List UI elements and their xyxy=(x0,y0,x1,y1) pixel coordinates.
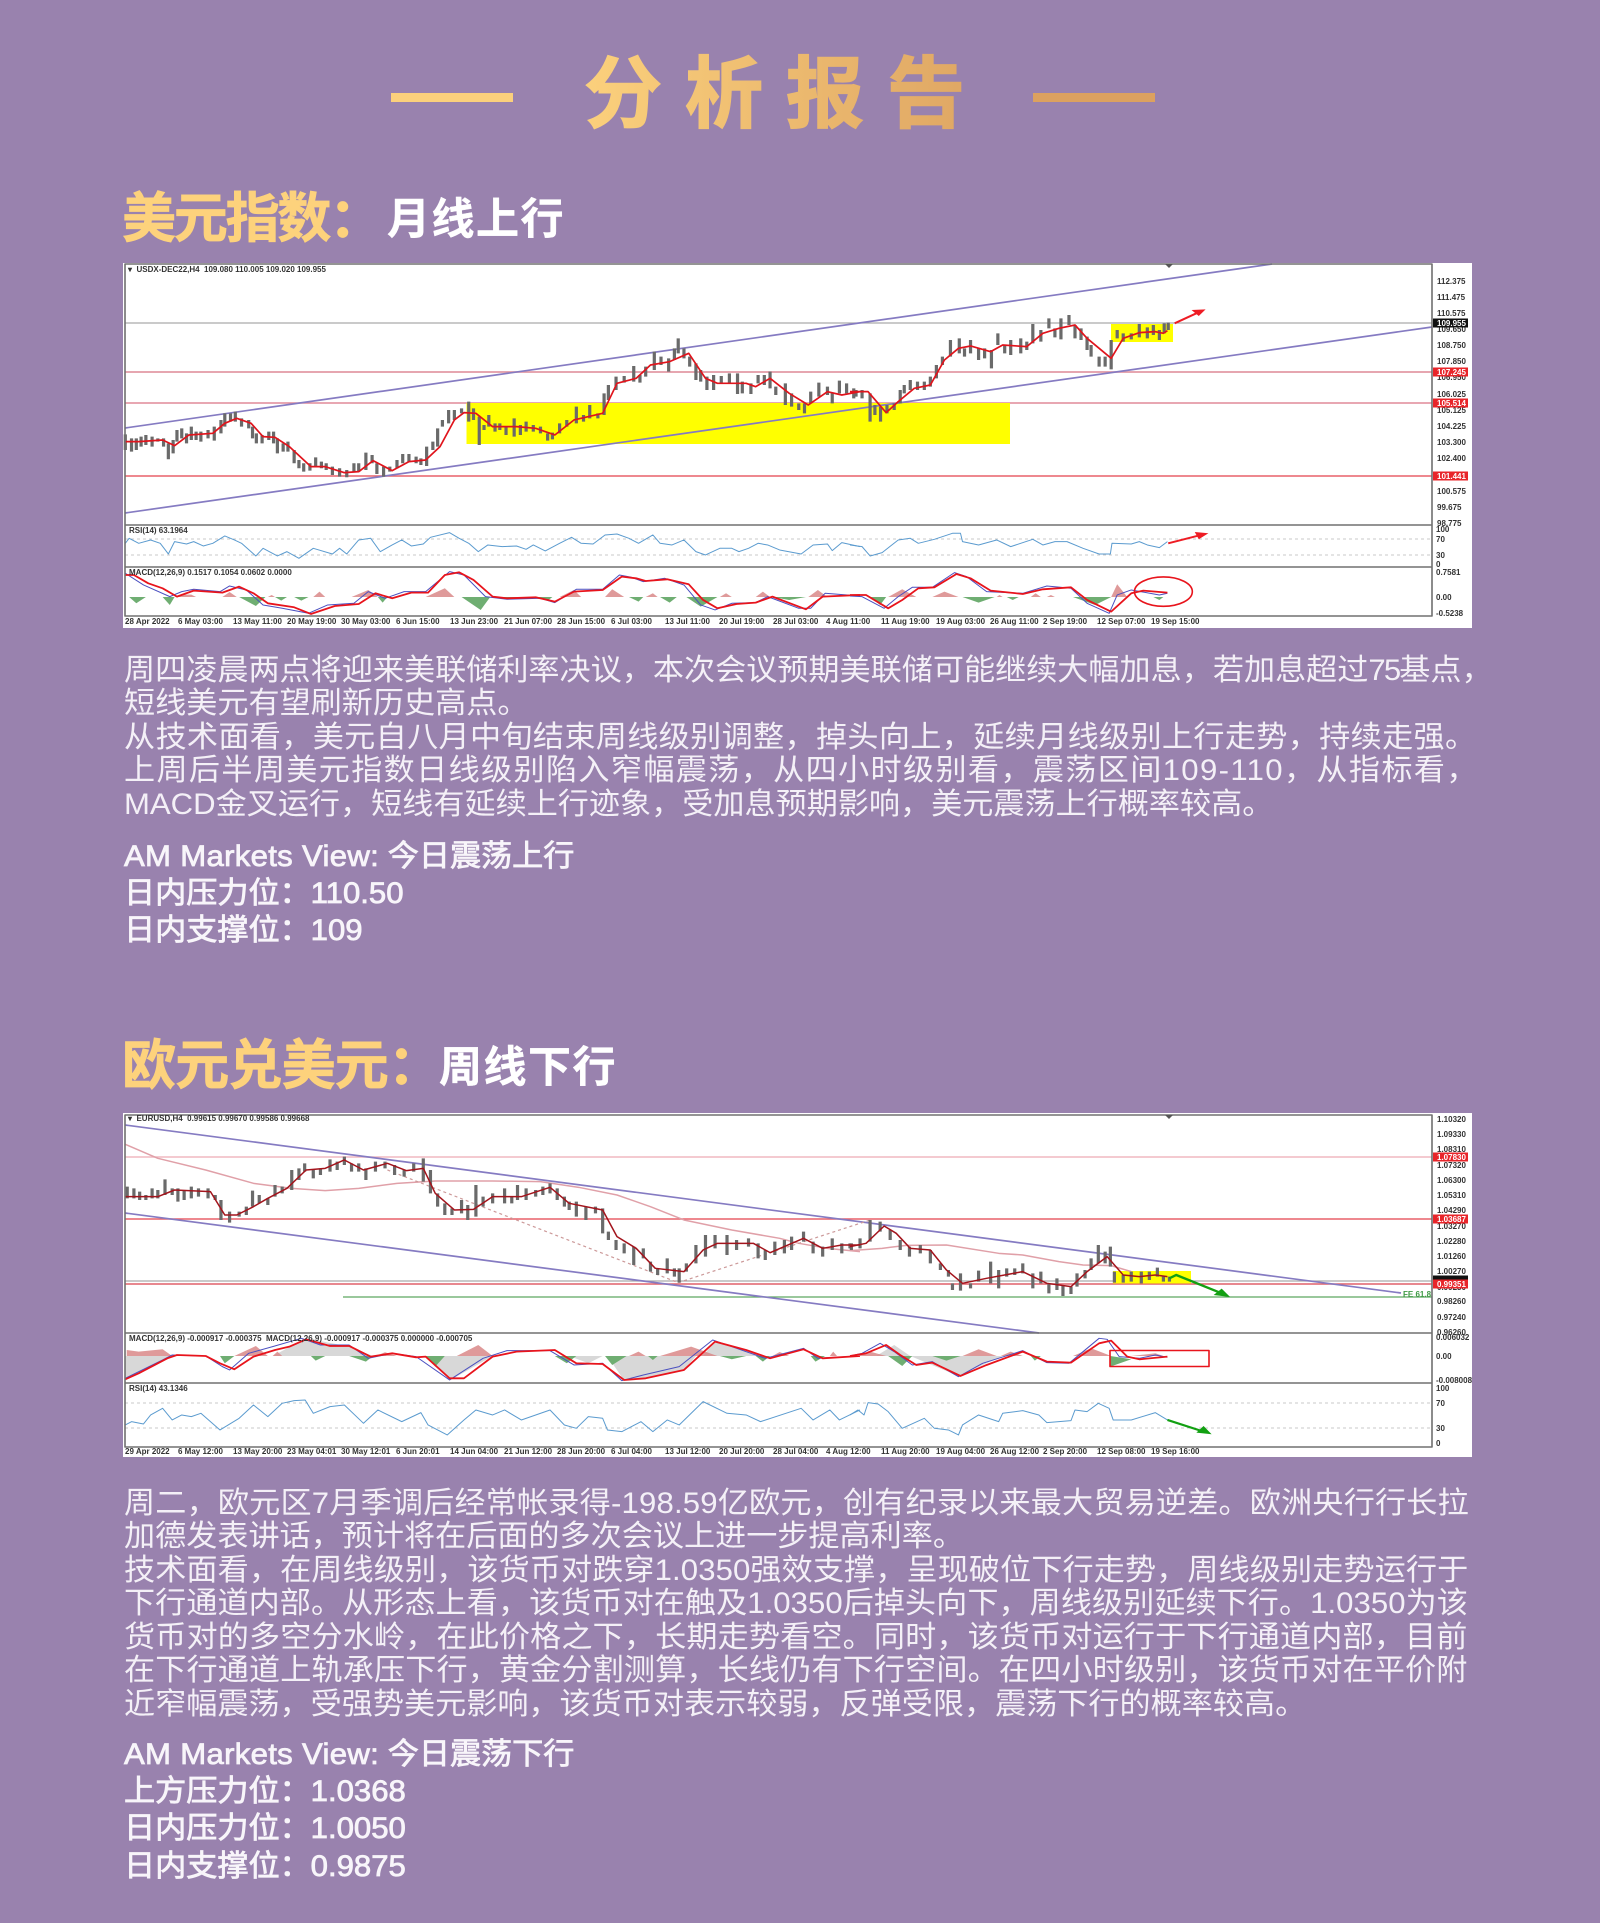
price axis labels: 104.225 xyxy=(1437,422,1466,431)
chart: USDX H4 xyxy=(123,263,1472,628)
price axis labels: 109.955 xyxy=(1437,319,1466,328)
horizontal levels xyxy=(125,323,1432,476)
price axis labels: 103.300 xyxy=(1437,438,1466,447)
arrow: RSI up xyxy=(1168,532,1208,543)
text block: euro analysis: 加德发表讲话，预计将在后面的多次会议上进一步提高利率。 xyxy=(124,1520,964,1553)
price axis labels: 0.006032 xyxy=(1436,1333,1470,1342)
arrow: RSI down xyxy=(1167,1420,1212,1434)
price axis labels: 111.475 xyxy=(1437,293,1466,302)
text block: euro analysis xyxy=(124,1486,1469,1721)
price axis labels: 1.01260 xyxy=(1437,1252,1466,1261)
text block: euro analysis: 周二，欧元区7月季调后经常帐录得-198.59亿欧元，创有纪录以来最大贸易逆差。欧洲央行行长拉 xyxy=(124,1486,1469,1520)
text block: dollar view and levels: AM Markets View: 今日震荡上行 xyxy=(124,840,574,873)
text block: dollar view and levels: 日内支撑位：109 xyxy=(124,914,363,947)
RSI caption: RSI(14) 43.1346 xyxy=(129,1384,188,1393)
price axis labels: 100.575 xyxy=(1437,487,1466,496)
price axis labels: 109.650 xyxy=(1437,325,1466,334)
time axis labels: 13 May 11:00 xyxy=(233,617,282,626)
time axis labels: 2 Sep 19:00 xyxy=(1043,617,1088,626)
text block: euro view and levels: 日内压力位：1.0050 xyxy=(124,1812,406,1845)
price axis labels: 98.775 xyxy=(1437,519,1462,528)
long moving average xyxy=(125,1144,1131,1272)
price axis labels: 106.025 xyxy=(1437,390,1466,399)
time axis labels: 20 Jul 20:00 xyxy=(719,1447,765,1456)
time axis labels: 30 May 03:00 xyxy=(341,617,391,626)
MACD caption: MACD(12,26,9) 0.1517 0.1054 0.0602 0.0000 xyxy=(129,568,292,577)
price axis labels: 0.98260 xyxy=(1437,1297,1466,1306)
time axis labels: 14 Jun 04:00 xyxy=(450,1447,499,1456)
text block: dollar analysis: 周四凌晨两点将迎来美联储利率决议，本次会议预期美联储可能继续大幅加息，若加息超过75基点， xyxy=(124,654,1493,686)
text block: euro analysis: 近窄幅震荡，受强势美元影响，该货币对表示较弱，反弹受限，震荡下行的概率较高。 xyxy=(124,1688,1306,1721)
FE level label: FE 61.8 xyxy=(1403,1290,1432,1299)
top marker xyxy=(1165,1115,1173,1119)
time axis labels: 26 Aug 11:00 xyxy=(990,617,1039,626)
text block: dollar view and levels xyxy=(124,840,574,947)
time axis labels: 13 Jul 12:00 xyxy=(665,1447,711,1456)
price axis labels: 0.00 xyxy=(1436,593,1452,602)
price axis labels: 0.00 xyxy=(1436,1352,1452,1361)
text block: dollar view and levels: 日内压力位：110.50 xyxy=(124,877,404,910)
yellow consolidation zones xyxy=(466,324,1173,444)
arrow: price up xyxy=(1175,309,1206,323)
time axis labels: 21 Jun 12:00 xyxy=(504,1447,553,1456)
text block: euro view and levels: 上方压力位：1.0368 xyxy=(124,1775,406,1808)
time axis labels: 19 Sep 16:00 xyxy=(1151,1447,1200,1456)
price axis labels: 107.850 xyxy=(1437,357,1466,366)
time axis labels: 6 Jul 04:00 xyxy=(611,1447,652,1456)
price axis labels: 112.375 xyxy=(1437,277,1466,286)
price axis labels: 1.04290 xyxy=(1437,1206,1466,1215)
price axis labels: 0.99230 xyxy=(1437,1283,1466,1292)
subheading: monthly up: 月线上行 xyxy=(387,196,565,244)
candles: right half xyxy=(850,1220,1169,1296)
price axis labels: -0.008008 xyxy=(1436,1376,1472,1385)
time axis labels: 6 May 03:00 xyxy=(178,617,223,626)
candles: left half xyxy=(125,338,854,477)
price axis labels: 105.125 xyxy=(1437,406,1466,415)
text block: dollar analysis: 上周后半周美元指数日线级别陷入窄幅震荡，从四小时级别看，震荡区间109-110，从指标看， xyxy=(124,754,1479,787)
time axis labels: 28 Jun 20:00 xyxy=(557,1447,606,1456)
panel: MACD xyxy=(125,1338,1167,1381)
time axis labels: 6 Jun 15:00 xyxy=(396,617,440,626)
panel: RSI xyxy=(125,533,1432,558)
price axis labels: 110.575 xyxy=(1437,309,1466,318)
price axis labels: 1.00270 xyxy=(1437,1267,1466,1276)
time axis labels: 23 May 04:01 xyxy=(287,1447,337,1456)
price axis labels: 0 xyxy=(1436,560,1441,569)
price axis labels: 1.10320 xyxy=(1437,1115,1466,1124)
candles: right half xyxy=(856,315,1168,422)
price axis labels: 1.03270 xyxy=(1437,1222,1466,1231)
arrow: price down xyxy=(1169,1275,1230,1297)
time axis labels xyxy=(125,617,1200,626)
price axis labels: 0.99351 xyxy=(1437,1280,1466,1289)
text block: dollar analysis xyxy=(124,654,1493,821)
moving average xyxy=(125,1160,1167,1287)
price axis labels: 101.441 xyxy=(1437,472,1466,481)
text block: euro analysis: 下行通道内部。从形态上看，该货币对在触及1.0350后掉头向下，周线级别延续下行。1.0350为该 xyxy=(124,1587,1468,1620)
time axis labels: 6 Jun 20:01 xyxy=(396,1447,440,1456)
heading: EUR/USD: 欧元兑美元： xyxy=(122,1036,441,1096)
price axis labels: 100 xyxy=(1436,1384,1450,1393)
title decoration right xyxy=(1033,93,1155,102)
text block: euro view and levels: 日内支撑位：0.9875 xyxy=(124,1850,406,1883)
price axis labels: 0.7581 xyxy=(1436,568,1461,577)
price axis labels: 1.06300 xyxy=(1437,1176,1466,1185)
price axis labels: 70 xyxy=(1436,535,1445,544)
price axis labels: 106.950 xyxy=(1437,373,1466,382)
dashed pattern lines xyxy=(387,1170,870,1283)
time axis labels: 6 Jul 03:00 xyxy=(611,617,652,626)
text block: euro analysis: 货币对的多空分水岭，在此价格之下，长期走势看空。同时，该货币对运行于下行通道内部，目前 xyxy=(124,1621,1468,1654)
price axis labels: 102.400 xyxy=(1437,454,1466,463)
chart frame xyxy=(125,264,1432,616)
chart: EURUSD H4 xyxy=(123,1113,1472,1457)
text block: euro analysis: 技术面看，在周线级别，该货币对跌穿1.0350强效支撑，呈现破位下行走势，周线级别走势运行于 xyxy=(124,1554,1468,1587)
time axis labels: 30 May 12:01 xyxy=(341,1447,391,1456)
heading: US dollar index: 美元指数： xyxy=(122,188,381,248)
price axis labels: 30 xyxy=(1436,1424,1445,1433)
horizontal levels xyxy=(125,1157,1432,1297)
time axis labels xyxy=(125,1447,1200,1456)
price axis labels: 1.03687 xyxy=(1437,1215,1466,1224)
candles: left half xyxy=(127,1157,851,1283)
time axis labels: 28 Jul 03:00 xyxy=(773,617,819,626)
price axis labels: -0.5238 xyxy=(1436,609,1464,618)
time axis labels: 20 Jul 19:00 xyxy=(719,617,765,626)
price axis labels: 100 xyxy=(1436,525,1450,534)
subheading: weekly down: 周线下行 xyxy=(439,1044,617,1092)
text block: euro view and levels: AM Markets View: 今日震荡下行 xyxy=(124,1738,574,1771)
price axis labels: 0.96260 xyxy=(1437,1328,1466,1337)
text block: dollar analysis: 短线美元有望刷新历史高点。 xyxy=(124,687,528,720)
chart frame xyxy=(125,1115,1432,1447)
time axis labels: 12 Sep 08:00 xyxy=(1097,1447,1146,1456)
time axis labels: 13 May 20:00 xyxy=(233,1447,283,1456)
price axis labels: 0.97240 xyxy=(1437,1313,1466,1322)
title decoration left xyxy=(391,93,513,102)
falling channel lines xyxy=(125,1125,1401,1333)
time axis labels: 20 May 19:00 xyxy=(287,617,337,626)
time axis labels: 19 Aug 04:00 xyxy=(936,1447,986,1456)
time axis labels: 26 Aug 12:00 xyxy=(990,1447,1040,1456)
price axis labels: 1.02280 xyxy=(1437,1237,1466,1246)
time axis labels: 13 Jul 11:00 xyxy=(665,617,710,626)
moving average: right half xyxy=(850,325,1167,413)
time axis labels: 19 Sep 15:00 xyxy=(1151,617,1200,626)
price axis labels: 1.07830 xyxy=(1437,1153,1466,1162)
chart caption: ▾ USDX-DEC22,H4 109.080 110.005 109.020 109.955 xyxy=(127,265,326,274)
yellow consolidation zone xyxy=(1113,1271,1191,1284)
text block: dollar analysis: 从技术面看，美元自八月中旬结束周线级别调整，掉头向上，延续月线级别上行走势，持续走强。 xyxy=(124,721,1476,754)
price axis labels: 99.675 xyxy=(1437,503,1462,512)
price axis labels xyxy=(1433,1115,1473,1448)
time axis labels: 28 Jun 15:00 xyxy=(557,617,606,626)
panel: MACD xyxy=(125,572,1167,614)
price axis labels: 107.245 xyxy=(1437,368,1466,377)
price axis labels: 1.08310 xyxy=(1437,1145,1466,1154)
time axis labels: 21 Jun 07:00 xyxy=(504,617,553,626)
text block: euro view and levels xyxy=(124,1738,574,1883)
time axis labels: 28 Apr 2022 xyxy=(125,617,170,626)
price axis labels: 105.514 xyxy=(1437,399,1466,408)
rising channel lines xyxy=(125,264,1432,513)
time axis labels: 11 Aug 19:00 xyxy=(881,617,930,626)
MACD caption: MACD(12,26,9) -0.000917 -0.000375 MACD(12,26,9) -0.000917 -0.000375 0.000000 -0.000705 xyxy=(129,1334,473,1343)
price axis labels: 1.09330 xyxy=(1437,1130,1466,1139)
moving average: left half xyxy=(125,353,860,473)
time axis labels: 6 May 12:00 xyxy=(178,1447,223,1456)
time axis labels: 19 Aug 03:00 xyxy=(936,617,986,626)
RSI caption: RSI(14) 63.1964 xyxy=(129,526,188,535)
time axis labels: 4 Aug 12:00 xyxy=(826,1447,871,1456)
price axis labels: 1.05310 xyxy=(1437,1191,1466,1200)
price axis labels: 70 xyxy=(1436,1399,1445,1408)
text block: euro analysis: 在下行通道上轨承压下行，黄金分割测算，长线仍有下行空间。在四小时级别，该货币对在平价附 xyxy=(124,1654,1468,1687)
panel: RSI xyxy=(125,1400,1432,1435)
time axis labels: 4 Aug 11:00 xyxy=(826,617,871,626)
title: 分析报告 xyxy=(584,50,988,138)
time axis labels: 28 Jul 04:00 xyxy=(773,1447,819,1456)
time axis labels: 13 Jun 23:00 xyxy=(450,617,499,626)
time axis labels: 11 Aug 20:00 xyxy=(881,1447,930,1456)
time axis labels: 29 Apr 2022 xyxy=(125,1447,170,1456)
callout: MACD red circle xyxy=(1134,577,1192,606)
time axis labels: 2 Sep 20:00 xyxy=(1043,1447,1088,1456)
price axis labels: 1.07320 xyxy=(1437,1161,1466,1170)
time axis labels: 12 Sep 07:00 xyxy=(1097,617,1146,626)
price axis labels xyxy=(1433,277,1468,618)
price axis labels: 108.750 xyxy=(1437,341,1466,350)
top marker xyxy=(1165,264,1173,268)
chart caption: ▾ EURUSD,H4 0.99615 0.99670 0.99586 0.99668 xyxy=(127,1114,310,1123)
text block: dollar analysis: MACD金叉运行，短线有延续上行迹象，受加息预期影响，美元震荡上行概率较高。 xyxy=(124,788,1273,821)
price axis labels: 0 xyxy=(1436,1439,1441,1448)
callout: MACD red rectangle xyxy=(1110,1350,1209,1366)
price axis labels: 30 xyxy=(1436,551,1445,560)
